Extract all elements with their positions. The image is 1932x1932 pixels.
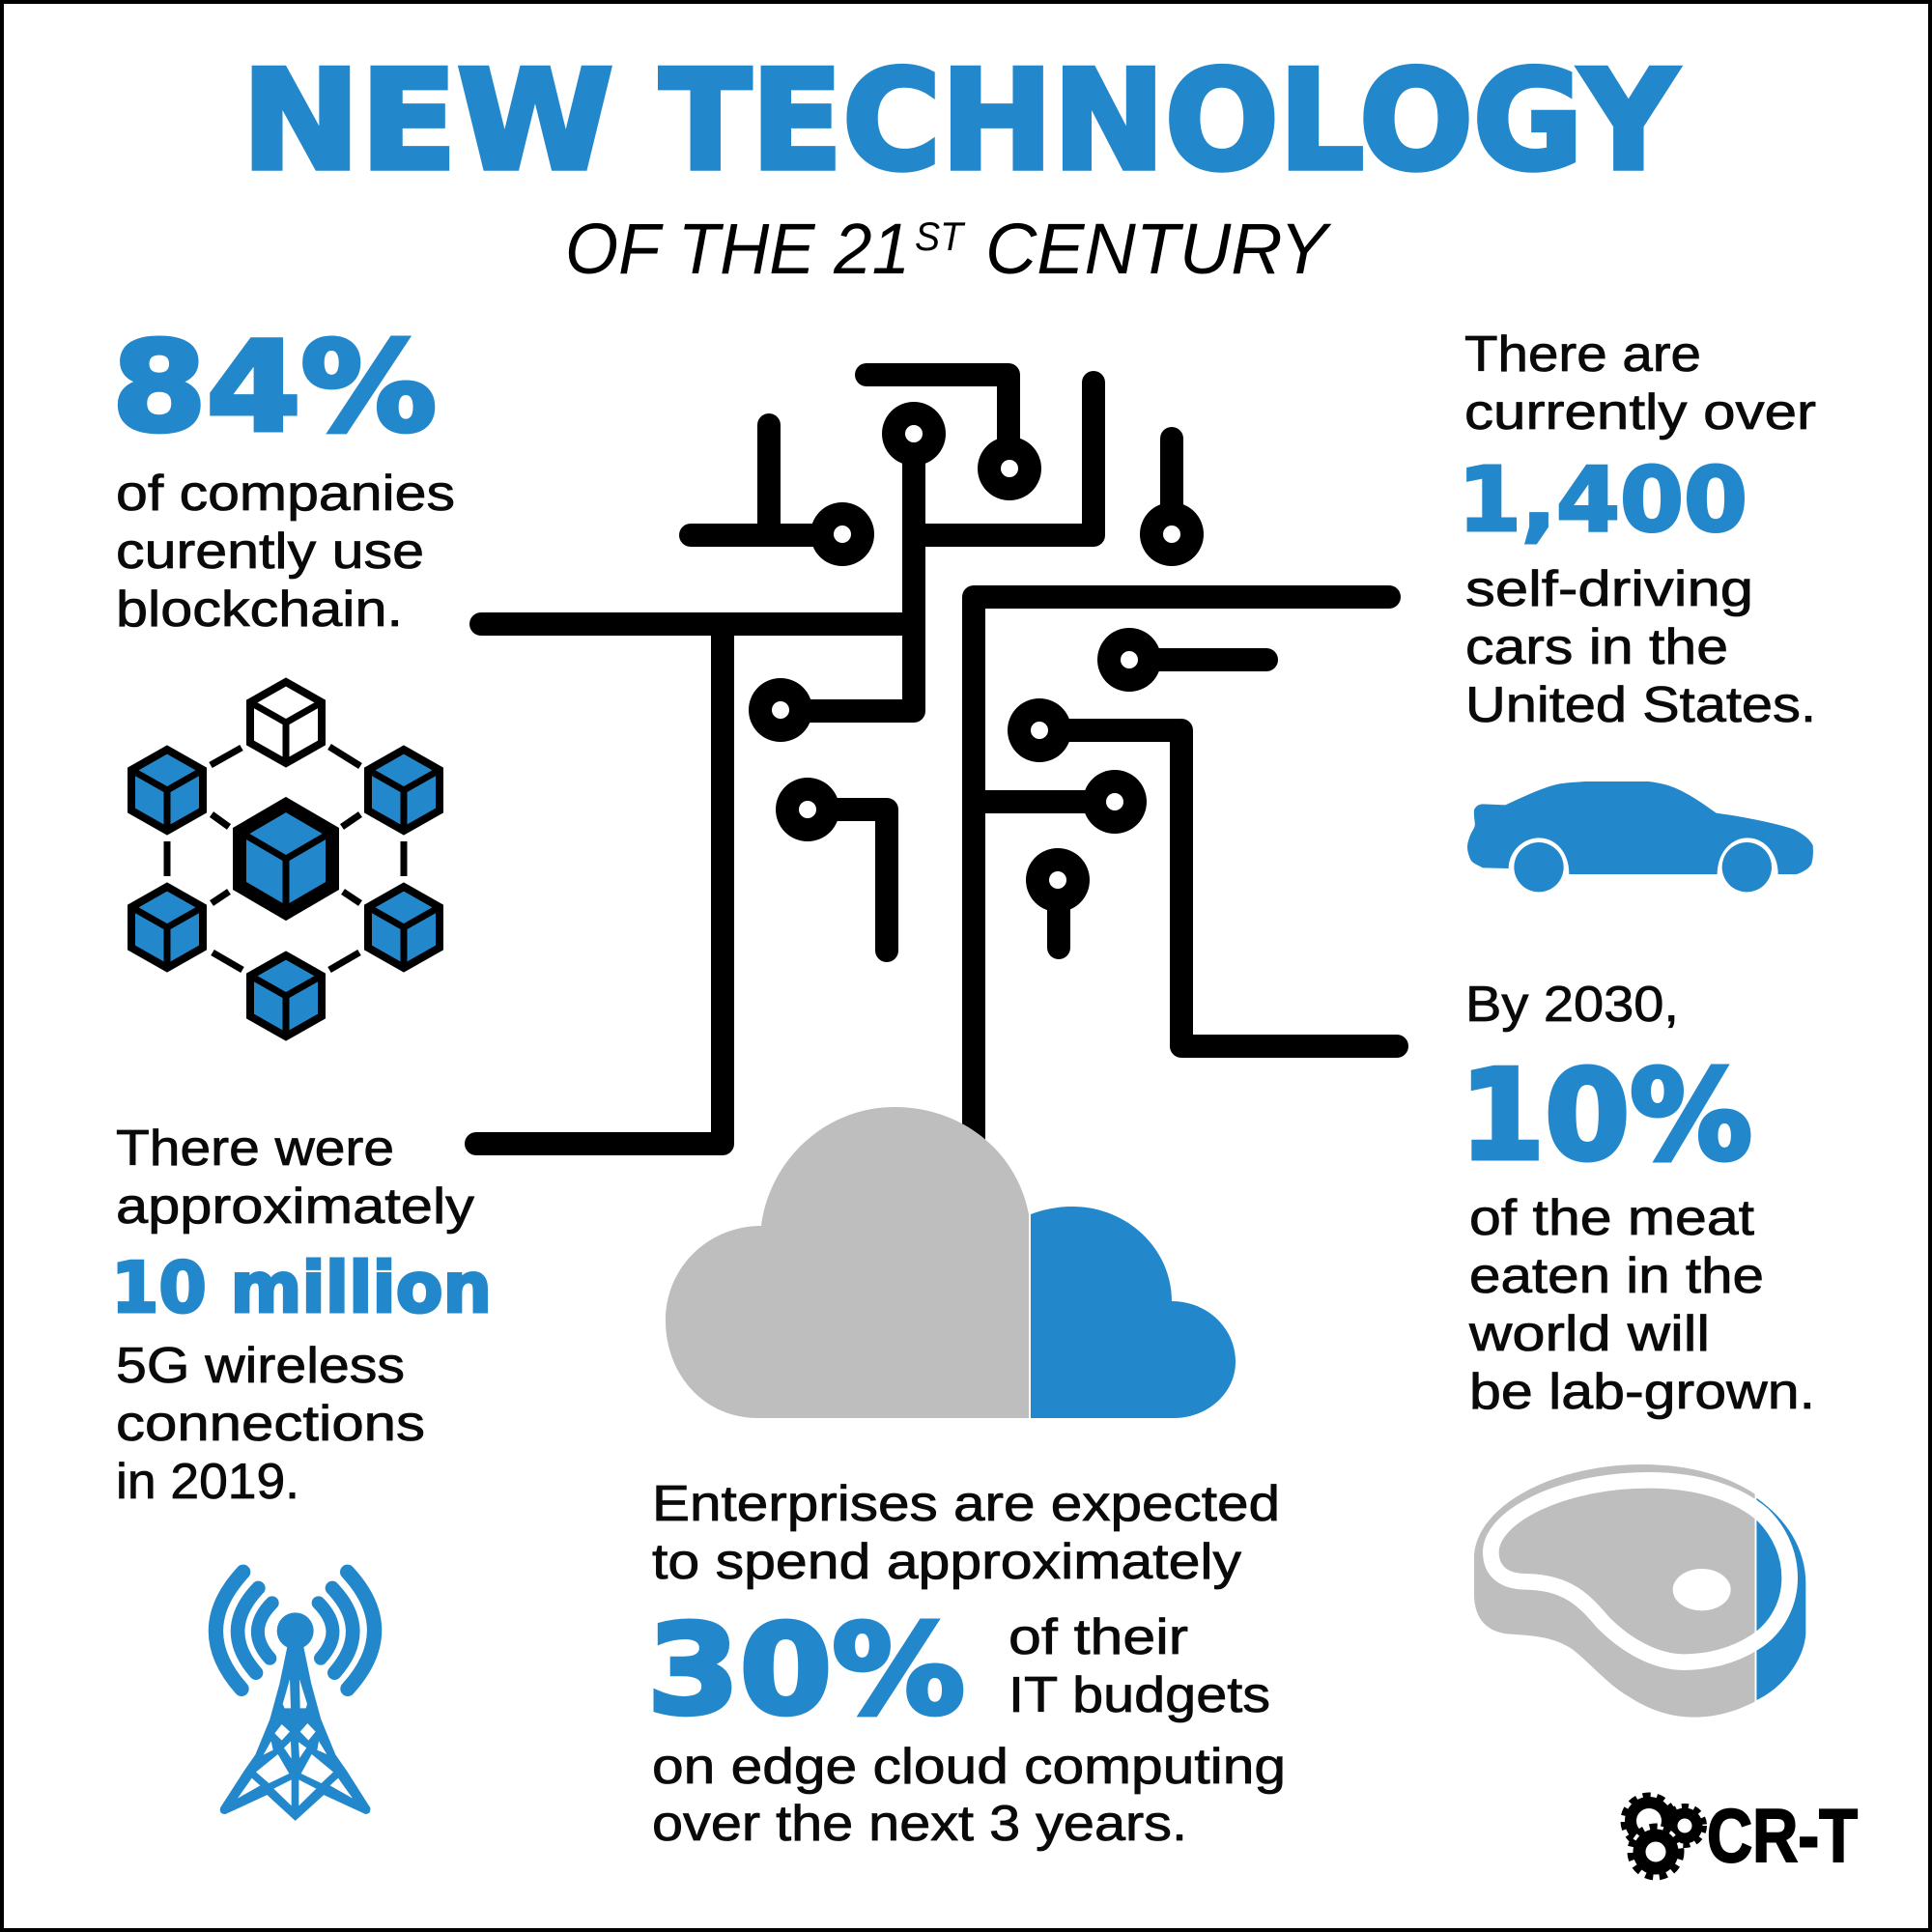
- text: meat description: eaten in the: [1469, 1248, 1764, 1304]
- subtitle: CENTURY: [985, 209, 1332, 289]
- text: IT budgets: of their: [1009, 1609, 1188, 1665]
- text: cars intro: currently over: [1464, 384, 1816, 440]
- stat: 10%: 10%: [1460, 1044, 1752, 1188]
- stat: 1,400: 1,400: [1458, 448, 1747, 552]
- panel: lab-grown meat stat: [1460, 977, 1815, 1718]
- text: IT budgets: IT budgets: [1009, 1667, 1270, 1723]
- text: enterprises intro: to spend approximately: [652, 1534, 1241, 1590]
- text: by 2030: By 2030,: [1465, 977, 1679, 1033]
- text: blockchain description: blockchain.: [116, 582, 403, 638]
- stat: 30%: 30%: [647, 1599, 965, 1743]
- text: 5G description: 5G wireless: [116, 1338, 405, 1394]
- text: cars intro: There are: [1464, 327, 1701, 383]
- text: enterprises intro: [652, 1476, 1280, 1590]
- text: cars description: [1465, 561, 1816, 733]
- panel: cloud spending stat: [647, 1476, 1286, 1852]
- text: edge cloud computing: [652, 1739, 1286, 1852]
- subtitle: ST: [915, 213, 966, 259]
- panel: blockchain stat: [112, 316, 455, 1037]
- text: 5G intro: There were: [116, 1121, 394, 1177]
- title: TECHNOLOGY: [660, 42, 1679, 201]
- icon: steak: [1474, 1464, 1805, 1718]
- text: meat description: [1468, 1190, 1815, 1420]
- icon: car: [1467, 781, 1813, 892]
- panel: self-driving cars stat: [1458, 327, 1816, 892]
- text: 5G intro: approximately: [116, 1179, 474, 1235]
- text: 5G description: connections: [116, 1396, 425, 1452]
- text: meat description: world will: [1468, 1306, 1710, 1362]
- text: IT budgets: [1009, 1609, 1270, 1723]
- subtitle: OF THE 21: [565, 209, 910, 289]
- text: 5G description: in 2019.: [116, 1454, 299, 1510]
- text: 5G description: [116, 1338, 425, 1510]
- diagram: circuit traces: [476, 375, 1397, 1246]
- text: 5G intro: [116, 1121, 474, 1235]
- text: blockchain description: curently use: [116, 524, 424, 580]
- text: cars description: self-driving: [1465, 561, 1753, 617]
- text: blockchain description: of companies: [116, 466, 455, 522]
- stat: 10 million: 10 million: [111, 1247, 492, 1328]
- title: [242, 42, 1679, 201]
- text: blockchain description: [116, 466, 455, 638]
- icon: cloud: [666, 1107, 1236, 1418]
- text: meat description: of the meat: [1469, 1190, 1755, 1246]
- icon: blockchain cubes: [131, 682, 440, 1037]
- panel: 5G stat: [111, 1121, 492, 1820]
- text: enterprises intro: Enterprises are expected: [652, 1476, 1280, 1532]
- text: edge cloud computing: on edge cloud computing: [652, 1739, 1286, 1795]
- title: NEW: [242, 42, 613, 201]
- text: cars description: United States.: [1465, 677, 1816, 733]
- stat: 84%: 84%: [112, 316, 437, 460]
- text: cars intro: [1464, 327, 1816, 440]
- icon: gears: [1624, 1796, 1704, 1878]
- text: edge cloud computing: over the next 3 years.: [652, 1796, 1187, 1852]
- subtitle: [565, 209, 1332, 289]
- wordmark: CR-T: [1707, 1793, 1858, 1878]
- text: meat description: be lab-grown.: [1469, 1364, 1815, 1420]
- text: cars description: cars in the: [1465, 619, 1728, 675]
- logo: CR-T: [1624, 1793, 1858, 1878]
- icon: radio tower: [215, 1572, 375, 1820]
